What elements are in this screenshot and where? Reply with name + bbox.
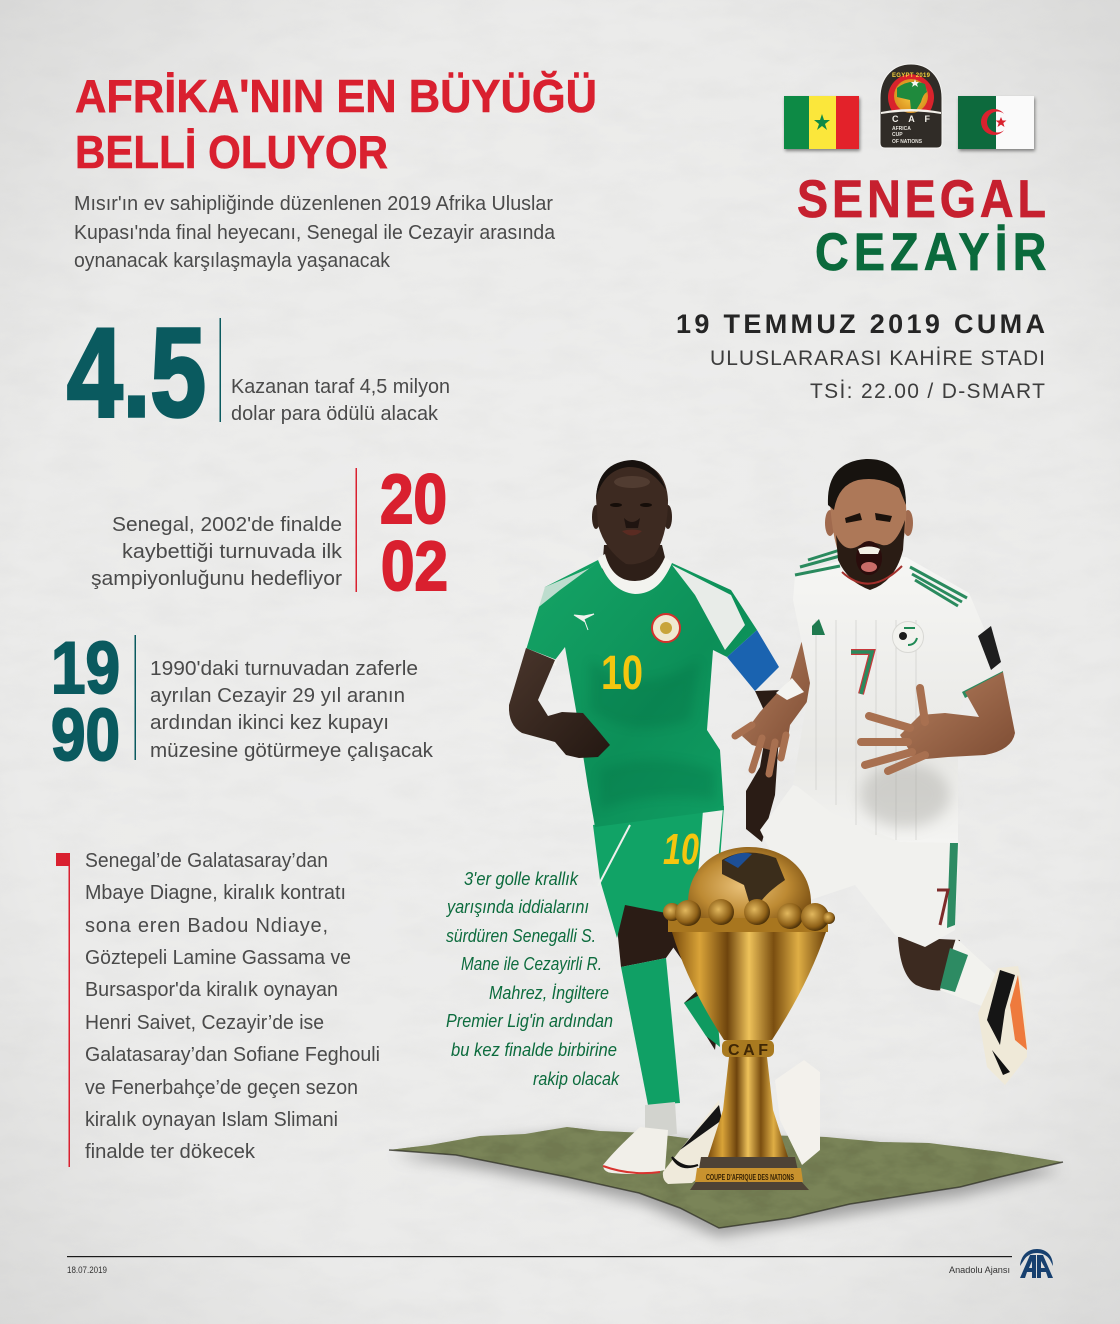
intro text: Kupası'nda final heyecanı, Senegal ile Cezayir arasında xyxy=(74,222,556,244)
stat: 1990: ayrılan Cezayir 29 yıl aranın xyxy=(150,685,405,707)
italic callout: yarışında iddialarını xyxy=(445,897,589,917)
icon: CAF Africa Cup logo: CUP xyxy=(892,132,903,138)
illustration: Africa Cup trophy xyxy=(663,847,835,1190)
stat: 2002: Senegal, 2002'de finalde xyxy=(112,514,342,536)
icon: CAF Africa Cup logo: EGYPT 2019 xyxy=(892,73,931,79)
Mahrez jersey number xyxy=(851,652,872,694)
players list note: Henri Saivet, Cezayir’de ise xyxy=(85,1012,324,1034)
match teams heading xyxy=(797,169,1046,282)
Mane shoes and legs xyxy=(603,880,820,1184)
illustration: Mane, Senegal player xyxy=(509,460,820,1184)
match details: 19 TEMMUZ 2019 CUMA xyxy=(676,309,1045,339)
intro text: oynanacak karşılaşmayla yaşanacak xyxy=(74,250,391,272)
italic callout: Mane ile Cezayirli R. xyxy=(461,954,602,974)
icon: CAF Africa Cup logo: CAF xyxy=(892,114,930,124)
stat: 4.5 xyxy=(67,302,450,443)
illustration: Mahrez, Algeria player xyxy=(735,459,1027,1085)
intro text xyxy=(74,193,556,272)
italic callout: 3'er golle krallık xyxy=(464,869,579,889)
stat: 2002: 20 xyxy=(380,460,447,538)
illustration: Africa Cup trophy: COUPE D'AFRIQUE DES NATIONS xyxy=(706,1173,794,1182)
match details: TSİ: 22.00 / D-SMART xyxy=(810,380,1045,403)
intro text: Mısır'ın ev sahipliğinde düzenlenen 2019 Afrika Uluslar xyxy=(74,193,553,215)
stat: 2002: şampiyonluğunu hedefliyor xyxy=(91,568,342,590)
illustration: Mane, Senegal player: 10 xyxy=(663,825,699,874)
players list note: Bursaspor'da kiralık oynayan xyxy=(85,979,338,1001)
icon: Anadolu Agency logo xyxy=(1020,1249,1053,1278)
footer: 18.07.2019 xyxy=(67,1265,107,1275)
stat: 4.5: dolar para ödülü alacak xyxy=(231,403,439,425)
icon: Senegal flag xyxy=(784,96,859,149)
Mahrez right arm xyxy=(861,672,1015,771)
Mane jersey number: 10 xyxy=(601,647,643,700)
Mahrez head xyxy=(825,459,913,590)
stat: 1990: 19 xyxy=(51,628,120,709)
trophy ring xyxy=(722,1040,774,1059)
title: AFRİKA'NIN EN BÜYÜĞÜ xyxy=(75,70,597,122)
Mahrez shorts xyxy=(760,785,960,947)
Mahrez leg and boot xyxy=(898,937,1027,1085)
match teams heading: CEZAYİR xyxy=(815,222,1046,282)
Mahrez left arm xyxy=(735,637,815,774)
trophy ring: CAF xyxy=(728,1042,768,1059)
stat: 1990: 90 xyxy=(51,695,120,776)
players list note: Mbaye Diagne, kiralık kontratı xyxy=(85,882,346,904)
match details: ULUSLARARASI KAHİRE STADI xyxy=(710,347,1045,370)
italic callout: bu kez finalde birbirine xyxy=(451,1040,617,1060)
trophy globe xyxy=(688,847,811,925)
stat: 2002: 02 xyxy=(381,527,448,605)
stat: 1990: ardından ikinci kez kupayı xyxy=(150,712,389,734)
icon: CAF Africa Cup logo: AFRICA xyxy=(892,126,911,132)
players list note: Galatasaray’dan Sofiane Feghouli xyxy=(85,1044,380,1066)
trophy cup xyxy=(672,932,826,1040)
stat: 4.5: Kazanan taraf 4,5 milyon xyxy=(231,376,450,398)
Mane shorts xyxy=(593,806,724,938)
italic callout: sürdüren Senegalli S. xyxy=(446,926,596,946)
italic callout: Premier Lig'in ardından xyxy=(446,1011,613,1031)
stat: 4.5: 4.5 xyxy=(67,302,206,443)
players list note: ve Fenerbahçe’de geçen sezon xyxy=(85,1077,358,1099)
match teams heading: SENEGAL xyxy=(797,169,1046,229)
players list note: sona eren Badou Ndiaye, xyxy=(85,915,328,937)
Mahrez jersey xyxy=(793,557,1003,843)
Mane far arm xyxy=(746,690,782,842)
Mane near arm xyxy=(509,648,610,758)
title xyxy=(75,70,597,178)
stat: 1990: 1990'daki turnuvadan zaferle xyxy=(150,658,418,680)
stat: 2002: kaybettiği turnuvada ilk xyxy=(122,541,343,563)
grass patch xyxy=(389,1127,1063,1237)
italic callout: rakip olacak xyxy=(533,1069,620,1089)
Mane neck xyxy=(602,545,668,586)
stat: 1990: müzesine götürmeye çalışacak xyxy=(150,740,434,762)
icon: Algeria flag xyxy=(958,96,1034,149)
players list note: Senegal’de Galatasaray’dan xyxy=(85,850,328,872)
players list note xyxy=(56,850,380,1167)
trophy base xyxy=(690,1157,809,1190)
icon: CAF Africa Cup logo xyxy=(880,64,942,148)
trophy band of balls xyxy=(663,899,835,932)
match details xyxy=(676,309,1045,403)
title: BELLİ OLUYOR xyxy=(75,126,388,178)
trophy stem xyxy=(708,1057,788,1157)
players list note: finalde ter dökecek xyxy=(85,1141,256,1163)
italic callout xyxy=(445,869,620,1089)
footer: Anadolu Ajansı xyxy=(949,1265,1010,1275)
footer xyxy=(67,1256,1012,1275)
Mane crest xyxy=(652,614,680,642)
stat: 2002 xyxy=(91,460,448,605)
Mane jersey xyxy=(526,560,757,827)
Mahrez crest xyxy=(892,622,924,652)
players list note: Göztepeli Lamine Gassama ve xyxy=(85,947,351,969)
players list note: kiralık oynayan Islam Slimani xyxy=(85,1109,338,1131)
stat: 1990 xyxy=(51,628,434,776)
italic callout: Mahrez, İngiltere xyxy=(489,983,609,1003)
Mane head xyxy=(592,460,672,564)
icon: CAF Africa Cup logo: OF NATIONS xyxy=(892,139,923,145)
